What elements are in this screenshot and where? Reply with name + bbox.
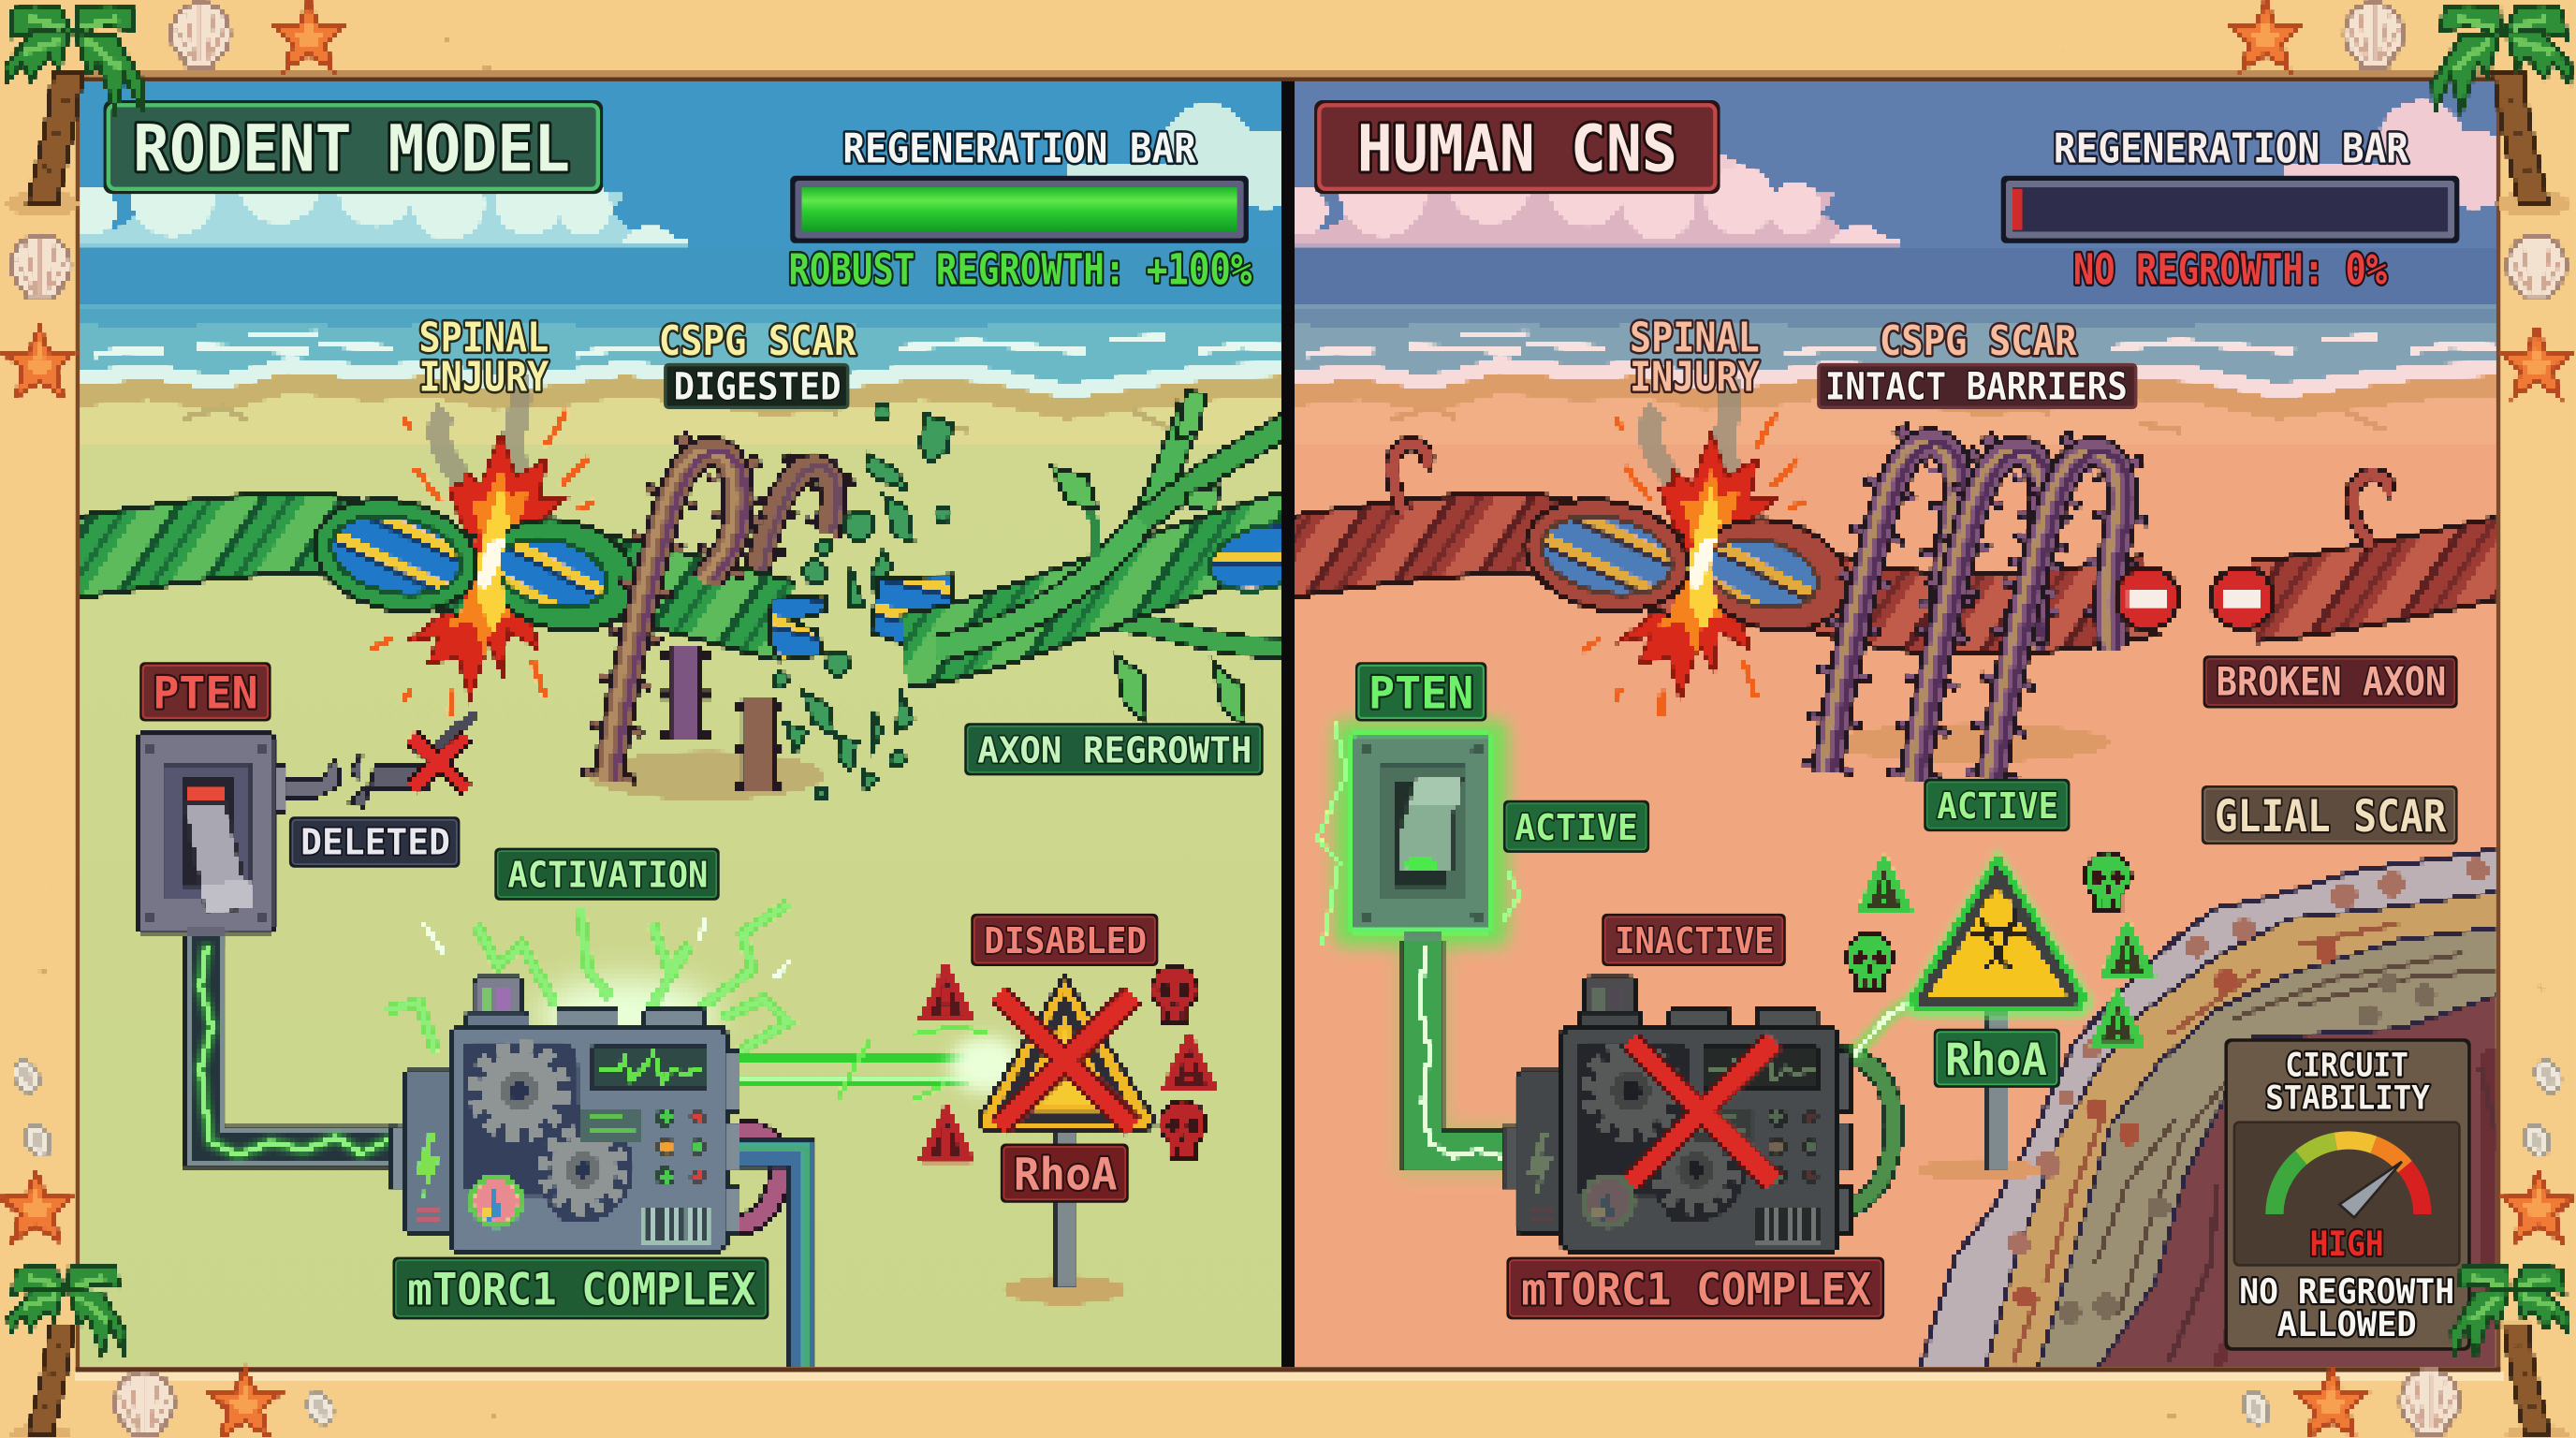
circuit stability panel: HIGH <box>2310 1224 2384 1264</box>
spinal injury label, rodent: INJURY <box>419 354 549 402</box>
PTEN label, human: PTEN <box>1368 668 1473 719</box>
mTORC1 machine, human (inactive) <box>1503 977 1852 1251</box>
rodent labels <box>104 100 1264 1319</box>
regeneration bar, rodent: ROBUST REGROWTH: +100% <box>788 245 1252 295</box>
INACTIVE label: INACTIVE <box>1615 920 1775 962</box>
PTEN label, rodent: PTEN <box>153 668 258 719</box>
RhoA label, human: RhoA <box>1945 1034 2047 1086</box>
RhoA sign, disabled <box>979 976 1153 1305</box>
regeneration bar, human <box>2001 125 2459 295</box>
spinal injury label, rodent: SPINAL <box>419 315 549 362</box>
spinal injury label, rodent <box>419 315 549 402</box>
mTORC1 label, human: mTORC1 COMPLEX <box>1521 1265 1871 1316</box>
DELETED label: DELETED <box>300 822 450 864</box>
ACTIVATION label: ACTIVATION <box>507 855 708 897</box>
icon: biohazard mark <box>1960 896 2036 970</box>
spinal injury label, human: SPINAL <box>1630 315 1760 362</box>
spinal injury label, human <box>1630 315 1760 402</box>
signal cable, human <box>1403 932 1519 1160</box>
smoke and explosion, human <box>1582 370 1806 714</box>
pink hose and output pipe <box>731 1131 807 1367</box>
explosion core <box>476 485 509 633</box>
rodent artwork <box>66 81 1327 1369</box>
CSPG scar label, rodent <box>659 317 856 408</box>
RhoA sign, active biohazard <box>1905 848 2093 1181</box>
scar fragments <box>773 405 953 800</box>
CSPG scar label, rodent: CSPG SCAR <box>659 317 856 365</box>
lightning above mTORC1 <box>386 903 788 1051</box>
title: rodent model: RODENT MODEL <box>133 112 570 187</box>
gauge: circuit stability high <box>2275 1140 2422 1218</box>
circuit stability panel: ALLOWED <box>2277 1304 2417 1344</box>
deleted PTEN switch <box>137 713 476 932</box>
circuit stability panel: NO REGROWTH <box>2239 1271 2454 1312</box>
rodent scene background <box>67 81 1305 1369</box>
icon: red cross over machine <box>1630 1040 1775 1183</box>
ACTIVE label, RhoA: ACTIVE <box>1937 785 2058 828</box>
AXON REGROWTH label: AXON REGROWTH <box>977 729 1251 771</box>
circuit stability panel <box>2224 1038 2471 1351</box>
title: human CNS: HUMAN CNS <box>1357 112 1677 187</box>
CSPG scar label, human: CSPG SCAR <box>1880 317 2077 365</box>
icon: no-entry signs <box>2116 567 2274 629</box>
warning icons and skulls, disabled <box>922 966 1214 1160</box>
icon: red cross over RhoA sign <box>999 994 1134 1127</box>
panel: human CNS <box>1277 81 2513 1371</box>
DISABLED label: DISABLED <box>984 920 1147 962</box>
mTORC1 label, rodent: mTORC1 COMPLEX <box>407 1265 755 1316</box>
CSPG scar label, human <box>1819 317 2136 408</box>
digested thorn scar <box>603 452 759 792</box>
cut axon rope, human <box>1277 444 2513 646</box>
human labels <box>1314 100 2471 1351</box>
signal cable: switch to machine <box>187 929 398 1155</box>
frayed axon core <box>768 594 827 661</box>
intact thorn barriers <box>1822 444 2129 781</box>
cut axon rope <box>66 485 785 646</box>
regeneration bar, rodent <box>788 125 1252 295</box>
GLIAL SCAR label: GLIAL SCAR <box>2215 791 2447 843</box>
side decorations <box>2 235 2572 1240</box>
icon: red cross over severed wire <box>411 736 466 788</box>
spinal injury label, human: INJURY <box>1630 354 1760 402</box>
circuit stability panel: STABILITY <box>2265 1079 2430 1118</box>
regeneration bar, rodent: REGENERATION BAR <box>842 125 1196 173</box>
active PTEN switch <box>1318 720 1519 946</box>
circuit stability panel: CIRCUIT <box>2285 1047 2408 1085</box>
ACTIVE label, switch: ACTIVE <box>1515 807 1638 849</box>
panel: rodent model <box>66 81 1327 1369</box>
bottom decorations <box>8 1266 2569 1438</box>
warning icons and skulls, active <box>1847 853 2152 1045</box>
mTORC1 machine, rodent <box>391 977 739 1251</box>
top decorations <box>5 2 2571 217</box>
regeneration bar, human: NO REGROWTH: 0% <box>2073 245 2388 295</box>
green return loop <box>1838 1055 1894 1208</box>
CSPG scar label, human: INTACT BARRIERS <box>1825 364 2128 408</box>
human scene background <box>1278 81 2513 1369</box>
RhoA label, rodent: RhoA <box>1014 1150 1117 1201</box>
explosion core, human <box>1687 485 1720 633</box>
glial scar mound <box>1919 848 2506 1371</box>
rear thorns <box>685 467 838 740</box>
axon regrowth vines <box>871 391 1327 726</box>
CSPG scar label, rodent: DIGESTED <box>674 364 842 408</box>
green leak to RhoA <box>1853 992 1925 1055</box>
title: human CNS <box>1314 100 1720 194</box>
smoke and explosion: spinal injury <box>372 370 594 714</box>
BROKEN AXON label: BROKEN AXON <box>2217 658 2446 704</box>
human artwork <box>1277 81 2513 1371</box>
green activation beam <box>739 1027 1022 1101</box>
regeneration bar, human: REGENERATION BAR <box>2054 125 2409 173</box>
